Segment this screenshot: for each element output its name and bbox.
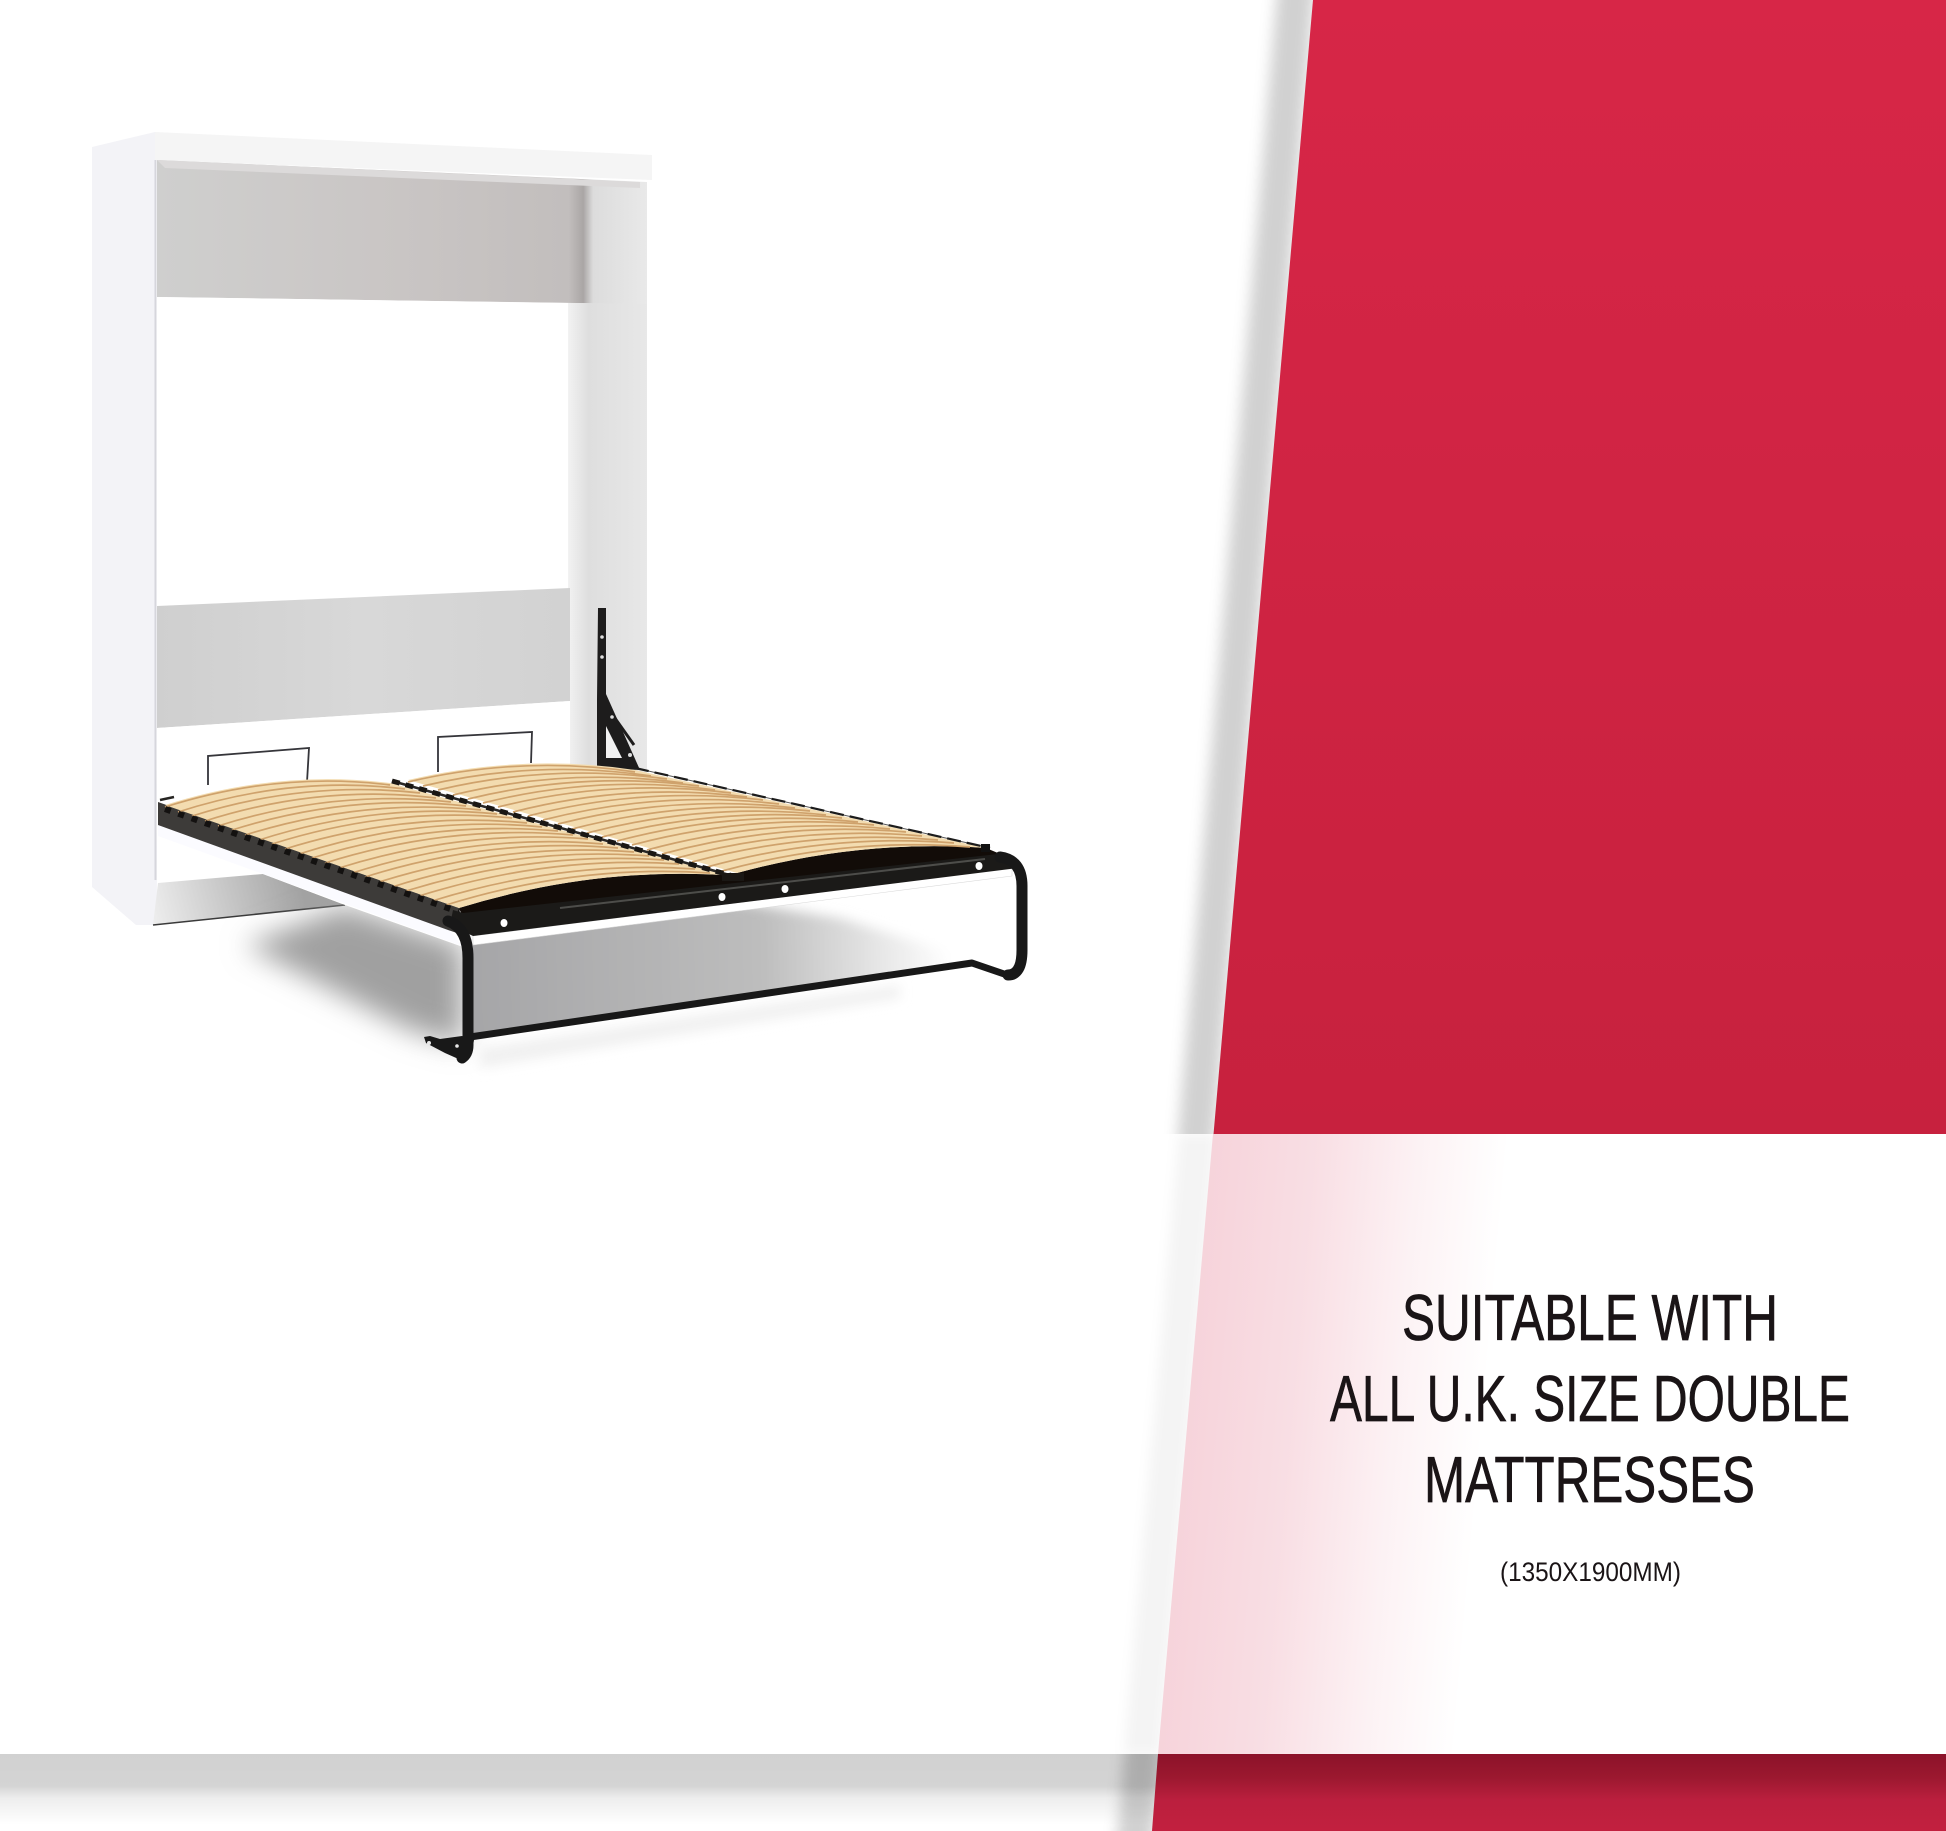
under-slat dark gap — [459, 846, 1005, 918]
leg right and base bar — [470, 857, 1022, 1037]
lower back panel — [157, 588, 570, 728]
wall bracket — [597, 608, 640, 770]
white front rail under frame — [473, 868, 1012, 945]
floor shadow between legs — [473, 904, 927, 1033]
floor shadow left — [245, 906, 463, 1045]
heading — [1330, 1281, 1850, 1516]
upper back panel — [157, 160, 647, 304]
lower opening — [157, 701, 570, 830]
slat clips — [165, 768, 990, 912]
upper opening — [157, 297, 568, 606]
white left rail under frame — [158, 824, 462, 946]
soft shadow beneath bar — [480, 985, 900, 1068]
front frame rail — [450, 853, 1018, 936]
image: wall bed — [92, 132, 1022, 1068]
cabinet top lintel — [155, 132, 652, 180]
cabinet right side panel — [568, 185, 647, 775]
frame bolts — [500, 862, 982, 927]
leg left — [448, 921, 468, 1058]
panel: dark red bottom band — [1152, 1754, 1946, 1831]
mattress dimensions: (1350X1900MM) — [1500, 1557, 1681, 1587]
heading: SUITABLE WITH — [1402, 1281, 1778, 1354]
slats right section — [408, 763, 986, 873]
plinth under cabinet — [153, 874, 345, 925]
wire loop left — [208, 748, 309, 785]
bottom grey strip — [0, 1754, 1175, 1831]
left frame rail — [158, 802, 466, 936]
panel: pale text band — [1118, 1134, 1946, 1754]
foot left — [424, 1036, 474, 1061]
heading: MATTRESSES — [1424, 1443, 1755, 1516]
wire loop right — [438, 732, 532, 772]
upper panel lip — [157, 160, 640, 188]
right side opening face — [568, 303, 647, 400]
panel: red diagonal background — [1213, 0, 1946, 1140]
cabinet left side panel — [92, 132, 157, 925]
diagonal panel shadow — [1116, 0, 1316, 1831]
slats left section — [165, 779, 725, 908]
